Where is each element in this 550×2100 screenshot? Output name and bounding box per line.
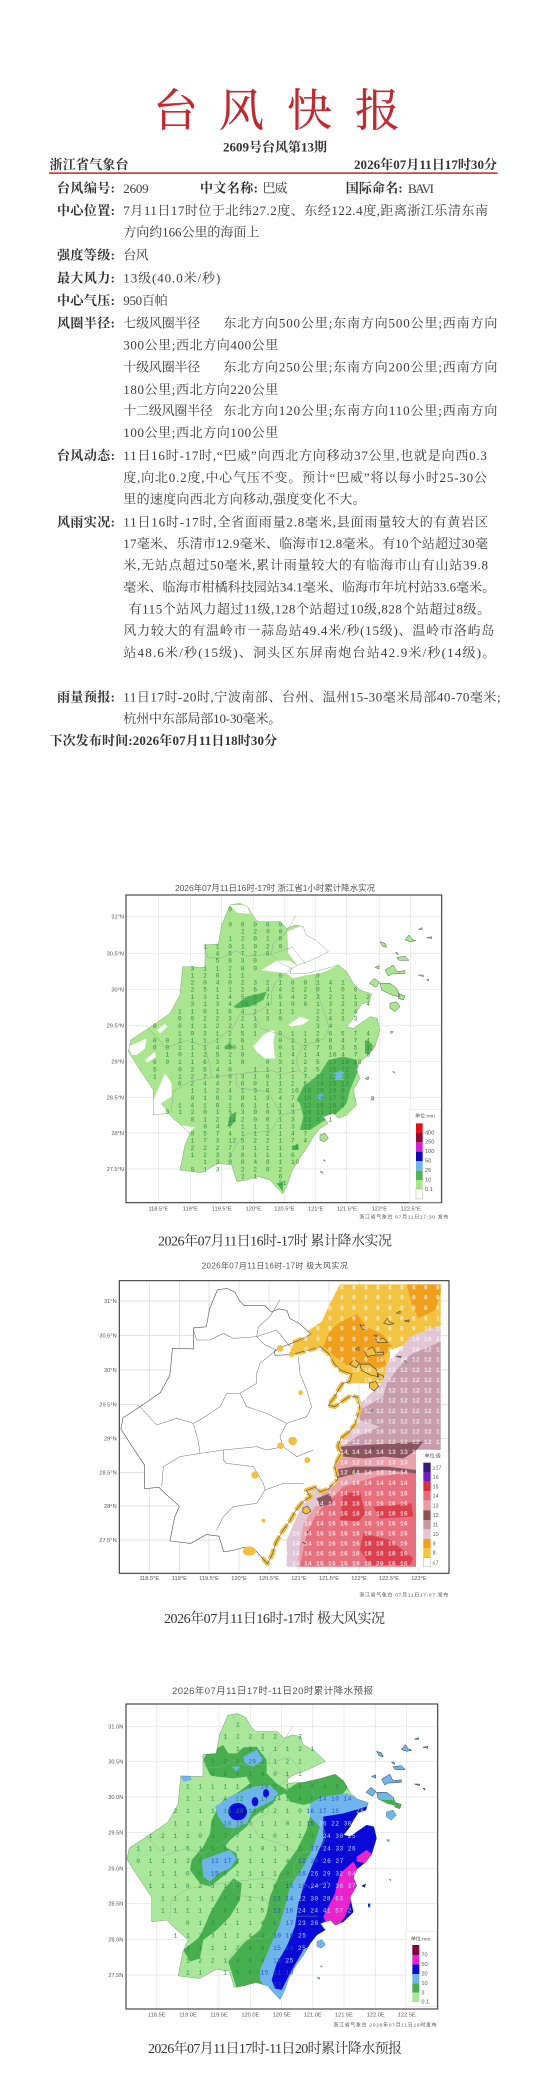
legend: wind scale: 13 bbox=[433, 1503, 439, 1509]
gust station values: 14 14 18 18 16 16 16 bbox=[328, 1490, 408, 1497]
field: typhoon movement: 台风动态: bbox=[57, 448, 115, 463]
legend: rainfall: 10 bbox=[425, 1177, 431, 1183]
province map bbox=[121, 1288, 409, 1564]
gust station values: 8 9 9 9 9 9 9 9 9 10 12 11 bbox=[304, 1346, 444, 1353]
axis labels: 28.5°N bbox=[99, 1471, 117, 1477]
issuer and date header bbox=[49, 157, 498, 174]
field: typhoon number and names bbox=[57, 180, 434, 196]
axis labels: 28.5N bbox=[108, 1902, 123, 1908]
axis labels: 31°N bbox=[104, 1299, 117, 1305]
rainfall station values: 5 0 2 5 4 0 1 1 1 1 2 5 15 22 bbox=[153, 1066, 350, 1073]
legend: wind scale: 8 bbox=[433, 1551, 436, 1557]
axis labels: 30°N bbox=[111, 987, 124, 993]
axis labels: 29.5°N bbox=[107, 1024, 124, 1030]
rainfall station values: 0 0 1 1 2 2 1 3 3 4 bbox=[153, 1023, 333, 1030]
gust station values: 8 8 8 8 8 8 8 8 8 9 10 bbox=[328, 1305, 456, 1312]
legend: rainfall: 50 bbox=[425, 1158, 431, 1164]
axis labels: 119°E bbox=[172, 1576, 187, 1582]
rainfall station values: 1 0 3 1 2 5 1 0 1 1 2 6 5 7 4 bbox=[178, 1030, 370, 1037]
gust station values: 14 14 16 16 16 18 18 16 16 16 bbox=[292, 1530, 408, 1537]
gust station values: 10 10 10 10 12 12 12 11 bbox=[352, 1429, 444, 1436]
rainfall station values: 2 5 1 1 2 6 4 4 2 2 0 1 0 0 bbox=[191, 987, 358, 994]
gust station values: 10 10 12 12 12 12 11 bbox=[364, 1377, 444, 1384]
axis labels: 30.5N bbox=[108, 1760, 123, 1766]
axis labels: 121.0E bbox=[304, 2013, 322, 2019]
legend: wind scale: ≤7 bbox=[433, 1560, 439, 1566]
forecast grid values: 1 1 1 1 5 1 6 4 1 1 0 1 1 2 17 24 33 26 bbox=[136, 1846, 356, 1853]
rainfall station values: 0 0 1 1 6 3 1 0 0 3 1 2 5 13 10 18 bbox=[153, 1059, 362, 1066]
field: typhoon number and names: BAVI bbox=[408, 181, 434, 196]
rainfall station values: 1 1 0 1 6 4 2 1 1 1 2 2 2 4 bbox=[178, 1009, 358, 1016]
axis labels: 122.5°E bbox=[379, 1576, 399, 1582]
axis labels: 120.5°E bbox=[259, 1576, 279, 1582]
gust station values: 14 14 16 16 16 18 18 20 16 16 bbox=[292, 1560, 408, 1567]
rainfall station values: 0 0 1 1 1 4 20 1 0 1 2 7 6 3 5 12 bbox=[153, 1045, 375, 1052]
gust station values: 11 12 12 12 12 12 11 bbox=[364, 1387, 444, 1394]
axis labels: 29.5°N bbox=[99, 1402, 117, 1408]
axis labels: 121.5°E bbox=[337, 1206, 357, 1212]
field: wind and rain observations: 17毫米、乐清市12.9毫米、临海市12.8毫米。有10个站超过30毫 bbox=[123, 536, 488, 551]
gust station values: 14 14 16 16 16 16 18 18 16 16 bbox=[292, 1540, 408, 1547]
rainfall station values: 1 1 2 4 1 3 0 2 10 16 20 19 6 bbox=[191, 1088, 345, 1095]
field: wind and rain observations: 风力较大的有温岭市一蒜岛站49.4米/秒(15级)、温岭市洛屿岛 bbox=[123, 623, 494, 638]
rainfall station values: 1 4 1 0 1 6 1 1 1 4 12 18 18 6 bbox=[178, 1102, 345, 1109]
forecast grid values: 1 1 1 1 3 6 1 1 5 13 16 24 24 41 57 27 bbox=[161, 1908, 356, 1915]
field: wind radius: 十二级风圈半径 bbox=[123, 403, 213, 418]
axis labels: 31°N bbox=[111, 915, 124, 921]
axis labels: 29.0N bbox=[108, 1866, 123, 1872]
legend: forecast rainfall: 70 bbox=[421, 1953, 428, 1959]
legend: forecast rainfall: 10 bbox=[421, 1981, 428, 1987]
axis labels: 118.5°E bbox=[139, 1576, 159, 1582]
legend: wind scale: 16 bbox=[433, 1475, 439, 1481]
gust station values: 14 14 16 16 16 16 16 16 16 bbox=[304, 1520, 408, 1527]
axis labels: 122.0E bbox=[367, 2013, 385, 2019]
axis labels: 120.5°E bbox=[274, 1206, 295, 1212]
forecast grid values: 6 2 8 20 3 1 2 1 bbox=[211, 1758, 302, 1765]
axis labels: 121.5E bbox=[335, 2013, 353, 2019]
legend: wind scale: 9 bbox=[433, 1541, 436, 1547]
forecast grid values: 1 8 1 1 1 2 1 bbox=[236, 1746, 315, 1753]
axis labels: 28.0N bbox=[108, 1937, 123, 1943]
axis labels: 121°E bbox=[291, 1576, 307, 1582]
field: typhoon movement: 11日16时-17时,“巴威”向西北方向移动37公里,也就是向西0.3 bbox=[123, 448, 487, 463]
axis labels: 122.5E bbox=[398, 2013, 416, 2019]
gust station values: 12 14 12 12 12 13 13 bbox=[328, 1459, 408, 1466]
forecast grid values bbox=[136, 1721, 364, 1989]
field: typhoon movement bbox=[57, 448, 487, 506]
axis labels: 120.5E bbox=[273, 2013, 291, 2019]
axis labels: 28°N bbox=[104, 1504, 117, 1510]
legend: wind scale: 15 bbox=[433, 1484, 439, 1490]
field: wind radius: 东北方向250公里;东南方向200公里;西南方向 bbox=[223, 360, 497, 374]
axis labels: 119.5°E bbox=[212, 1206, 232, 1212]
map caption: 2026年07月11日16时-17时 极大风实况 bbox=[164, 1610, 385, 1627]
field: typhoon number and names: 国际命名: bbox=[346, 180, 403, 196]
rainfall station values bbox=[153, 906, 375, 1187]
gust station values: 8 9 9 9 9 8 8 8 9 10 10 bbox=[316, 1326, 444, 1333]
axis labels: 28°N bbox=[111, 1131, 124, 1137]
gust station values: 8 8 9 9 9 9 9 9 9 10 10 11 bbox=[304, 1336, 444, 1343]
map title: 2026年07月11日17时-11日20时累计降水预报 bbox=[172, 1685, 373, 1697]
rainfall station values: 0 0 2 1 1 1 2 6 0 2 1 6 8 4 7 4 bbox=[153, 1038, 370, 1045]
forecast grid values: 1 1 1 1 10 15 5 1 1 0 1 15 26 22 30 bbox=[174, 1820, 352, 1827]
axis labels: 120.0E bbox=[241, 2013, 260, 2019]
forecast grid values: 1 1 3 3 1 1 4 4 10 16 25 bbox=[174, 1932, 306, 1939]
field: intensity: 强度等级: bbox=[57, 248, 115, 262]
forecast grid values: 0 1 1 1 2 6 11 17 2 1 1 1 4 12 20 26 27 bbox=[136, 1858, 344, 1865]
legend: forecast rainfall bbox=[406, 1932, 437, 2007]
axis labels: 120°E bbox=[246, 1206, 261, 1212]
forecast grid values: 1 1 1 5 6 15 11 18 bbox=[186, 1970, 294, 1977]
gust station values: 8 8 8 8 8 8 8 9 9 bbox=[340, 1284, 440, 1291]
axis labels: 122°E bbox=[372, 1206, 387, 1212]
issuer and date header: 浙江省气象台 bbox=[50, 157, 129, 172]
field: rain forecast: 11日17时-20时,宁波南部、台州、温州15-30毫米局部40-70毫米; bbox=[123, 690, 501, 704]
forecast grid values: 1 2 1 1 0 3 7 7 1 1 0 1 2 3 24 30 25 bbox=[149, 1833, 356, 1840]
forecast grid values: 1 1 1 1 1 8 14 1 1 4 4 4 5 bbox=[186, 1783, 339, 1790]
issue number: 2609号台风第13期 bbox=[223, 140, 327, 154]
forecast grid values: 2 1 1 1 13 28 14 2 2 1 0 16 17 16 26 bbox=[174, 1808, 364, 1815]
axis labels: 29.5N bbox=[108, 1831, 123, 1837]
field: typhoon movement: 度,向北0.2度,中心气压不变。预计“巴威”将以每小时25-30公 bbox=[123, 470, 487, 485]
field: wind and rain observations: 站48.6米/秒(15级)、洞头区东屏南炮台站42.9米/秒(14级)。 bbox=[123, 645, 495, 660]
chart: maximum gust observation map bbox=[99, 1260, 456, 1627]
axis labels: 27.5°N bbox=[99, 1538, 117, 1544]
rainfall station values: 21 bbox=[279, 1180, 287, 1187]
rainfall station values: 5 6 3 0 bbox=[216, 957, 257, 964]
rainfall station values: 0 1 3 2 2 0 2 bbox=[191, 1166, 283, 1173]
forecast shading bbox=[127, 1714, 437, 2003]
rainfall station values: 2 0 4 0 2 3 2 1 0 0 1 4 1 bbox=[191, 979, 345, 986]
gust station values: 10 12 12 12 12 12 12 11 bbox=[352, 1408, 444, 1415]
axis labels: 30°N bbox=[104, 1368, 117, 1374]
field: wind radius: 东北方向120公里;东南方向110公里;西南方向 bbox=[223, 403, 497, 418]
legend: wind scale: 14 bbox=[433, 1494, 439, 1500]
field: wind radius: 东北方向500公里;东南方向500公里;西南方向 bbox=[223, 316, 497, 330]
rainfall station values: 1 1 0 1 0 2 0 bbox=[203, 943, 283, 950]
legend: forecast rainfall: 50 bbox=[421, 1962, 428, 1968]
rainfall station values: 3 1 1 2 0 0 bbox=[191, 965, 258, 972]
forecast grid values: 1 2 2 2 2 2 bbox=[224, 1734, 302, 1741]
legend: forecast rainfall: 0.1 bbox=[421, 2000, 429, 2006]
gust station values: 12 12 12 12 12 12 12 12 11 bbox=[340, 1439, 444, 1446]
legend: rainfall: 400 bbox=[425, 1130, 434, 1136]
forecast grid values: 1 bbox=[236, 1721, 240, 1728]
axis labels: 119.5°E bbox=[199, 1576, 219, 1582]
field: centre position bbox=[57, 203, 488, 240]
rainfall station values: 0 0 2 2 3 2 1 3 0 2 4 3 3 bbox=[178, 1016, 358, 1023]
axis labels: 119°E bbox=[183, 1206, 198, 1212]
field: wind and rain observations: 风雨实况: bbox=[57, 514, 115, 530]
map caption: 2026年07月11日17时-11日20时累计降水预报 bbox=[148, 2040, 402, 2057]
issuer note: 浙江省气象台 07月11日17:30 发布 bbox=[359, 1213, 448, 1220]
next issue time: 下次发布时间:2026年07月11日18时30分 bbox=[50, 733, 277, 748]
field: typhoon number and names: 2609 bbox=[123, 181, 149, 196]
axis labels: 121°E bbox=[308, 1206, 324, 1212]
axis labels bbox=[108, 1725, 416, 2019]
axis labels: 122°E bbox=[351, 1576, 367, 1582]
field: wind radius: 180公里;西北方向220公里 bbox=[123, 382, 278, 397]
rainfall shading bbox=[128, 903, 432, 1194]
field: intensity: 台风 bbox=[123, 248, 149, 262]
issuer and date header: 2026年07月11日17时30分 bbox=[354, 157, 497, 172]
panel: typhoon bulletin text bbox=[50, 180, 501, 748]
rainfall station values: 1 1 2 7 6 0 3 1 0 1 1 7 11 12 23 bbox=[153, 1073, 350, 1080]
rainfall station values: 1 3 0 0 4 0 1 10 bbox=[203, 1159, 300, 1166]
forecast grid values: 13 bbox=[273, 1982, 282, 1989]
axis labels: 30.0N bbox=[108, 1795, 123, 1801]
field: wind radius: 风圈半径: bbox=[57, 316, 115, 330]
axis labels: 123°E bbox=[411, 1576, 427, 1582]
gust station values: 12 12 14 14 14 14 14 bbox=[328, 1470, 408, 1477]
legend: forecast rainfall: 20 bbox=[421, 1972, 428, 1978]
field: typhoon movement: 里的速度向西北方向移动,强度变化不大。 bbox=[123, 492, 366, 506]
field: max wind: 最大风力: bbox=[57, 270, 115, 286]
gust station values bbox=[280, 1284, 456, 1567]
field: wind radius: 300公里;西北方向400公里 bbox=[123, 338, 278, 352]
field: max wind bbox=[57, 270, 220, 286]
rainfall station values: 4 5 7 2 0 bbox=[216, 951, 270, 958]
gust station values: 10 10 10 12 12 12 12 11 bbox=[352, 1367, 444, 1374]
field: centre position: 方向约166公里的海面上 bbox=[123, 224, 259, 240]
field: typhoon number and names: 中文名称: bbox=[200, 180, 258, 196]
axis labels: 30.5°N bbox=[99, 1334, 117, 1340]
field: rain forecast bbox=[57, 690, 501, 726]
legend: wind scale: 12 bbox=[433, 1513, 439, 1519]
rainfall station values: 1 0 1 2 5 2 0 1 4 1 4 16 4 7 8 bbox=[166, 1052, 371, 1059]
axis labels: 30.5°N bbox=[107, 951, 124, 957]
field: wind radius: 七级风圈半径 bbox=[123, 316, 200, 330]
map caption: 2026年07月11日16时-17时 累计降水实况 bbox=[158, 1232, 392, 1250]
axis labels: 29°N bbox=[111, 1059, 124, 1065]
field: typhoon number and names: 台风编号: bbox=[57, 180, 115, 196]
field: max wind: 13级(40.0米/秒) bbox=[123, 270, 220, 286]
field: rain forecast: 杭州中东部局部10-30毫米。 bbox=[123, 711, 281, 726]
rainfall station values: 2 2 2 7 3 1 1 1 16 bbox=[191, 1145, 299, 1152]
gust station values: 10 14 14 16 16 16 18 18 18 18 16 bbox=[280, 1550, 408, 1557]
rainfall station values: 1 3 1 4 5 5 7 5 4 2 2 2 1 1 2 bbox=[191, 994, 370, 1001]
axis labels bbox=[99, 1299, 427, 1582]
gust station values: 9 9 9 9 10 10 10 12 12 11 bbox=[328, 1357, 444, 1364]
legend: wind scale: ≥17 bbox=[433, 1465, 442, 1471]
field: centre position: 7月11日17时位于北纬27.2度、东经122.4度,距离浙江乐清东南 bbox=[123, 203, 488, 218]
rainfall station values: 0 5 7 4 1 1 2 1 4 7 bbox=[191, 1131, 308, 1138]
field: centre position: 中心位置: bbox=[57, 203, 115, 218]
field: wind and rain observations: 11日16时-17时,全省面雨量2.8毫米,县面雨量较大的有黄岩区 bbox=[123, 514, 488, 530]
forecast grid values: 1 1 1 0 2 3 1 4 1 1 6 15 15 24 27 38 37 bbox=[149, 1883, 356, 1890]
legend: rainfall: 25 bbox=[425, 1168, 431, 1174]
field: wind radius: 100公里;西北方向100公里 bbox=[123, 425, 278, 440]
legend: wind scale bbox=[416, 1450, 448, 1568]
forecast grid values: 0 1 3 1 1 1 4 6 17 23 26 4 bbox=[186, 1920, 340, 1927]
rainfall station values: 0 bbox=[228, 906, 233, 913]
rainfall station values: 1 2 0 1 1 0 0 bbox=[191, 972, 320, 979]
rainfall station values: 1 2 0 1 0 bbox=[228, 936, 283, 943]
axis labels: 120°E bbox=[231, 1576, 247, 1582]
gust station values: 14 14 16 18 16 18 18 16 bbox=[316, 1510, 408, 1517]
axis labels: 118.5°E bbox=[148, 1206, 168, 1212]
forecast grid values: 1 1 1 4 12 17 14 1 4 6 14 10 14 bbox=[186, 1796, 352, 1803]
legend: rainfall: 250 bbox=[425, 1140, 434, 1146]
map title: 2026年07月11日16时-17时 极大风实况 bbox=[202, 1260, 348, 1270]
rainfall station values: 0 4 7 1 1 1 1 3 17 bbox=[203, 1123, 312, 1130]
chart: 3-hour rainfall forecast map bbox=[108, 1685, 438, 2057]
rainfall station values: 0 0 0 0 0 bbox=[228, 921, 283, 928]
field: wind and rain observations: 毫米、临海市柑橘科技园站34.1毫米、临海市年坑村站33.6毫米。 bbox=[123, 580, 495, 594]
legend: rainfall: 0.1 bbox=[425, 1187, 433, 1193]
legend: wind scale: 单位:级 bbox=[424, 1453, 441, 1460]
rainfall station values: 0 1 0 3 8 1 3 4 7 18 26 17 6 bbox=[191, 1095, 345, 1102]
legend: forecast rainfall: 单位:mm bbox=[411, 1935, 430, 1942]
axis labels: 31.0N bbox=[108, 1725, 123, 1731]
issuer note: 浙江省气象台 07月11日17:07 发布 bbox=[359, 1591, 448, 1598]
legend: forecast rainfall: 3 bbox=[421, 1990, 424, 1996]
field: intensity bbox=[57, 248, 149, 262]
rainfall station values: 3 1 3 4 16 8 4 1 0 0 1 3 2 3 4 bbox=[191, 1001, 370, 1008]
field: pressure: 中心气压: bbox=[57, 293, 115, 308]
gust station values: 8 8 8 8 8 8 8 8 8 9 10 bbox=[328, 1295, 456, 1302]
forecast grid values: 5 5 6 1 4 0 1 1 bbox=[211, 1771, 302, 1778]
title: 台风快报 bbox=[153, 86, 400, 136]
rainfall station values: 0 1 2 0 1 5 3 0 0 1 3 20 11 12 bbox=[166, 1109, 337, 1116]
gust shading over sea bbox=[287, 1284, 441, 1567]
gust station values: 14 14 14 14 13 13 13 bbox=[340, 1449, 420, 1456]
field: wind and rain observations bbox=[57, 514, 495, 660]
legend: wind scale: 11 bbox=[433, 1522, 438, 1528]
forecast grid values: 4 1 1 1 2 4 4 15 24 25 bbox=[186, 1945, 306, 1952]
field: typhoon number and names: 巴威 bbox=[262, 180, 288, 196]
axis labels: 29°N bbox=[104, 1436, 117, 1442]
legend: wind scale: 10 bbox=[433, 1532, 439, 1538]
field: pressure bbox=[57, 293, 168, 308]
axis labels: 27.5N bbox=[108, 1973, 123, 1979]
rainfall station values: 0 2 4 4 7 6 0 1 1 2 6 14 15 12 bbox=[178, 1081, 349, 1088]
gust station values: 10 14 14 14 14 14 14 bbox=[328, 1480, 408, 1487]
axis labels: 119.0E bbox=[179, 2013, 197, 2019]
gust station values: 10 12 12 12 12 12 12 11 bbox=[352, 1398, 444, 1405]
forecast grid values: 1 1 1 0 5 15 6 2 1 1 1 9 16 26 29 32 54 bbox=[149, 1870, 356, 1877]
axis labels: 119.5E bbox=[210, 2013, 228, 2019]
axis labels: 122.5°E bbox=[401, 1206, 421, 1212]
gust station values: 9 8 8 9 9 8 8 8 8 9 10 bbox=[316, 1315, 444, 1322]
issuer note: 浙江省气象台 2026年07月11日16时发布 bbox=[333, 2021, 437, 2028]
field: wind radius: 十级风圈半径 bbox=[123, 360, 200, 374]
gust station values: 14 16 18 18 16 16 16 16 bbox=[316, 1500, 408, 1507]
axis labels: 121.5°E bbox=[319, 1576, 339, 1582]
gust station values: 10 10 10 12 12 12 12 11 bbox=[352, 1418, 444, 1425]
legend: rainfall: 100 bbox=[425, 1149, 434, 1155]
legend: rainfall: 单位:mm bbox=[415, 1113, 435, 1120]
axis labels: 27.5°N bbox=[107, 1167, 124, 1173]
rainfall station values: 1 2 3 3 0 1 1 1 6 bbox=[191, 1152, 295, 1159]
rainfall station values: 1 7 3 12 5 2 2 1 7 4 bbox=[191, 1138, 308, 1145]
field: wind radius bbox=[57, 316, 497, 440]
forecast grid values: 1 2 2 1 4 4 9 18 25 bbox=[186, 1957, 294, 1964]
rainfall station values: 2 1 6 bbox=[241, 1173, 283, 1180]
field: wind and rain observations: 有115个站风力超过11级,128个站超过10级,828个站超过8级。 bbox=[129, 602, 490, 616]
forecast grid values: 1 1 1 1 1 3 4 1 1 13 14 22 30 28 63 bbox=[161, 1895, 344, 1902]
axis labels: 118.5E bbox=[148, 2013, 166, 2019]
rainfall station values: 0 1 2 14 2 0 0 1 3 11 4 1 bbox=[191, 1116, 333, 1123]
legend: rainfall bbox=[409, 1109, 441, 1202]
map title: 2026年07月11日16时-17时 浙江省1小时累计降水实况 bbox=[175, 883, 375, 893]
field: pressure: 950百帕 bbox=[123, 293, 168, 308]
chart: 1-hour rainfall observation map bbox=[107, 883, 448, 1250]
axis labels: 28.5°N bbox=[107, 1096, 124, 1102]
field: wind and rain observations: 米,无站点超过50毫米,累计雨量较大的有临海市山有山站39.8 bbox=[123, 558, 488, 572]
axis labels bbox=[107, 915, 421, 1212]
rainfall station values: 2 2 0 0 bbox=[241, 929, 283, 936]
field: rain forecast: 雨量预报: bbox=[57, 690, 115, 704]
